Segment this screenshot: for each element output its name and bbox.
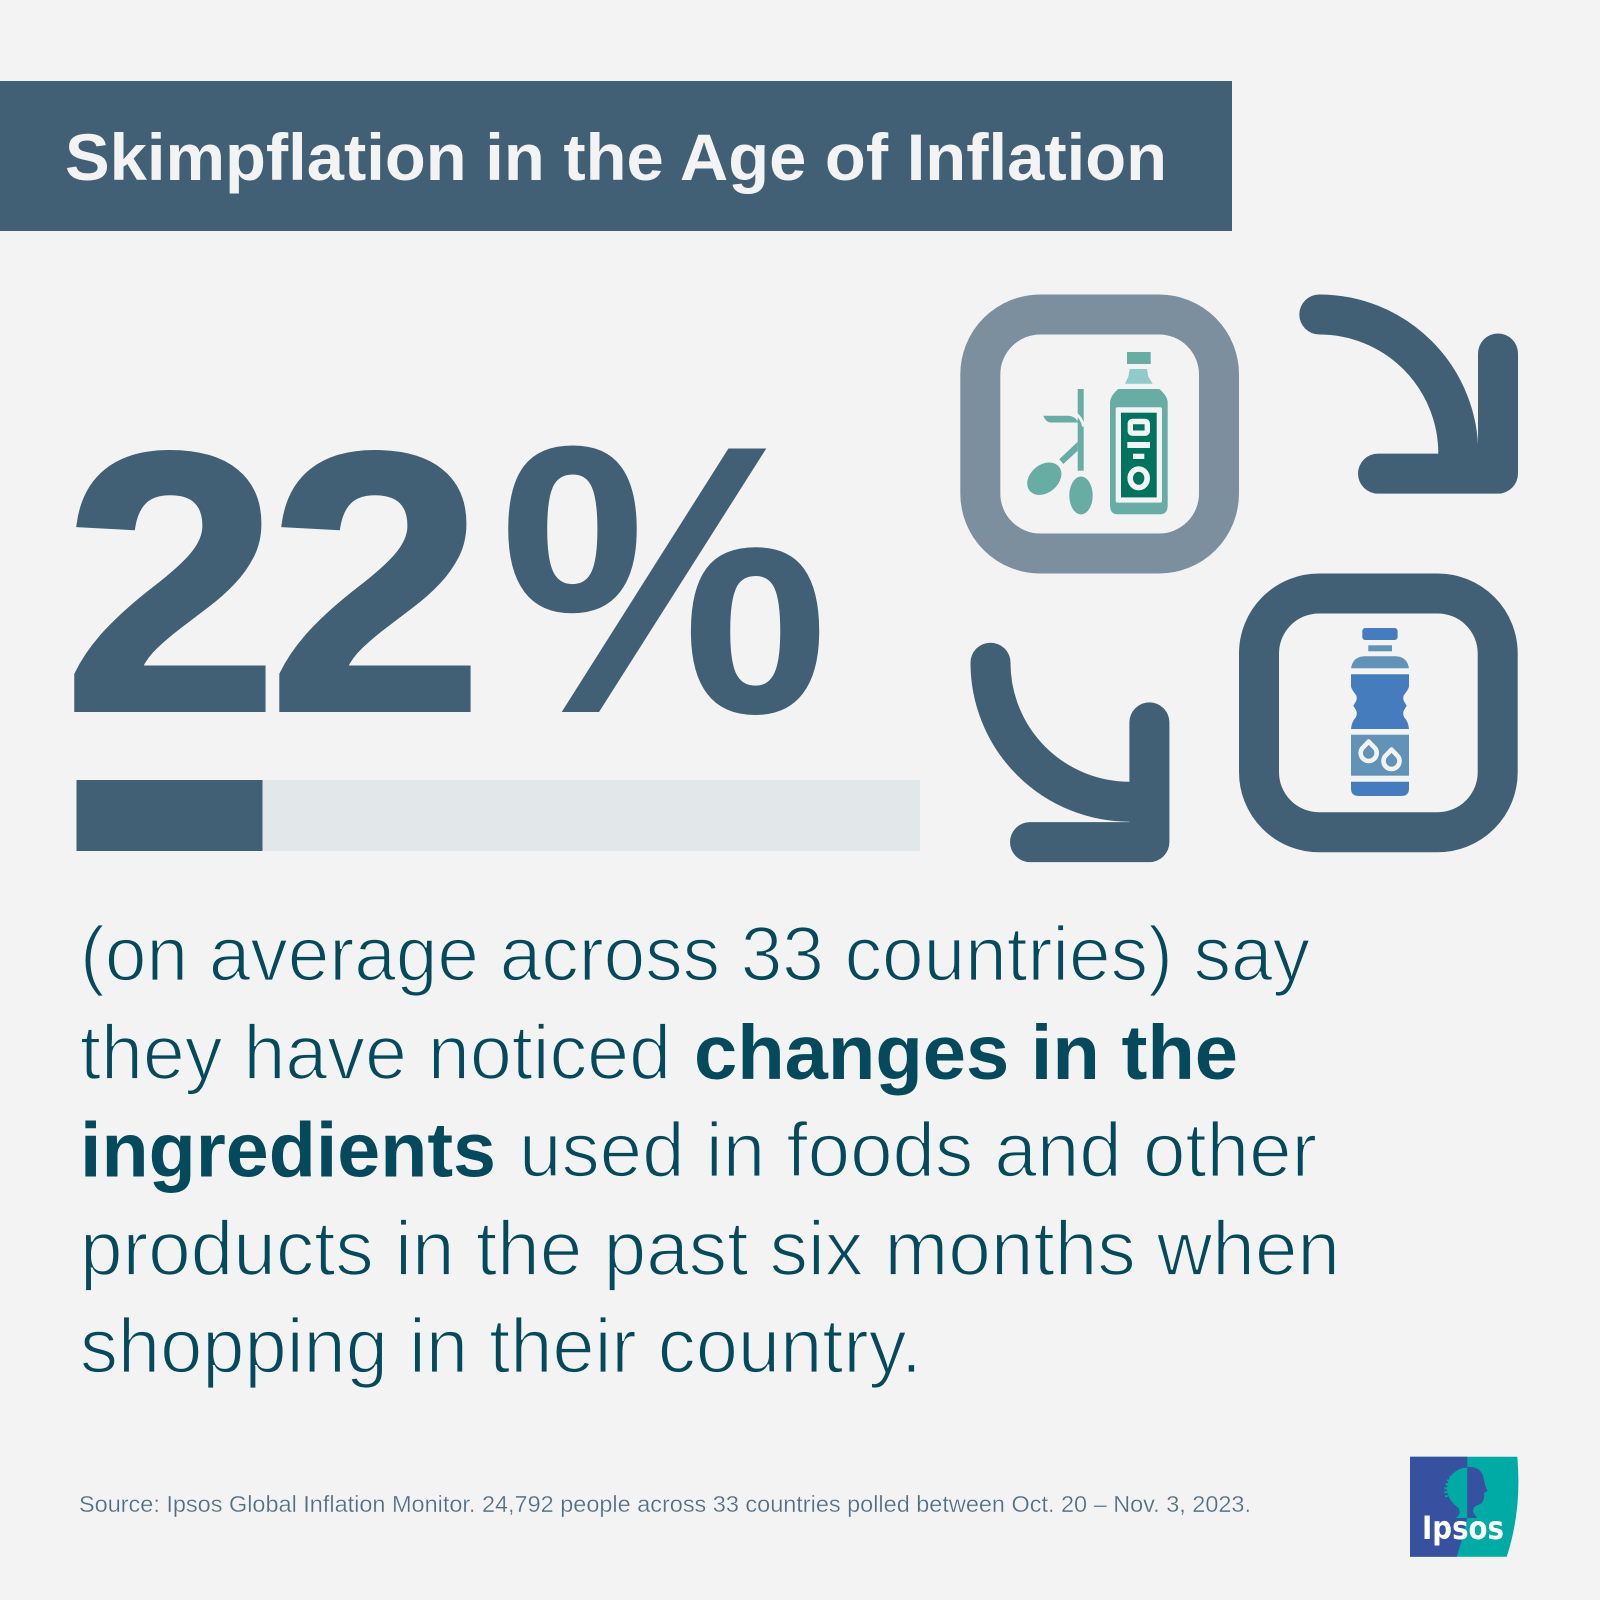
body text: they have noticed xyxy=(80,1010,671,1096)
logo: Ipsos xyxy=(1410,1457,1518,1557)
logo head right (profile) xyxy=(1467,1467,1488,1518)
body text: used in foods and other xyxy=(519,1108,1317,1194)
body text: changes in the xyxy=(694,1010,1238,1096)
body text: shopping in their country. xyxy=(80,1304,922,1390)
bottle xyxy=(1351,628,1409,796)
body text: (on average across 33 countries) say xyxy=(80,912,1310,998)
body text: products in the past six months when xyxy=(80,1206,1340,1292)
body text xyxy=(80,912,1340,1390)
big statistic: 22%: % xyxy=(499,366,829,794)
title: Skimpflation in the Age of Inflation xyxy=(65,120,1167,194)
big statistic: 22%: 22 xyxy=(64,376,474,788)
big statistic: 22% xyxy=(64,366,829,794)
source note: Source: Ipsos Global Inflation Monitor. 24,792 people across 33 countries polled between Oct. 20 – Nov. 3, 2023. xyxy=(79,1491,1251,1517)
arrow: top right, pointing down to water bottle xyxy=(1299,294,1498,474)
arrow: bottom left, pointing down-right to olive oil xyxy=(970,643,1149,842)
progress bar: 22 percent xyxy=(76,780,920,851)
icon: olive oil in rounded square xyxy=(980,314,1219,554)
logo: Ipsos: Ipsos xyxy=(1422,1509,1504,1547)
logo head left (tree) xyxy=(1446,1468,1467,1518)
body text: ingredients xyxy=(80,1108,496,1194)
title banner xyxy=(0,81,1232,231)
olive branch xyxy=(1021,389,1093,514)
icon: water bottle in rounded square xyxy=(1259,594,1498,832)
oil bottle xyxy=(1110,352,1168,514)
